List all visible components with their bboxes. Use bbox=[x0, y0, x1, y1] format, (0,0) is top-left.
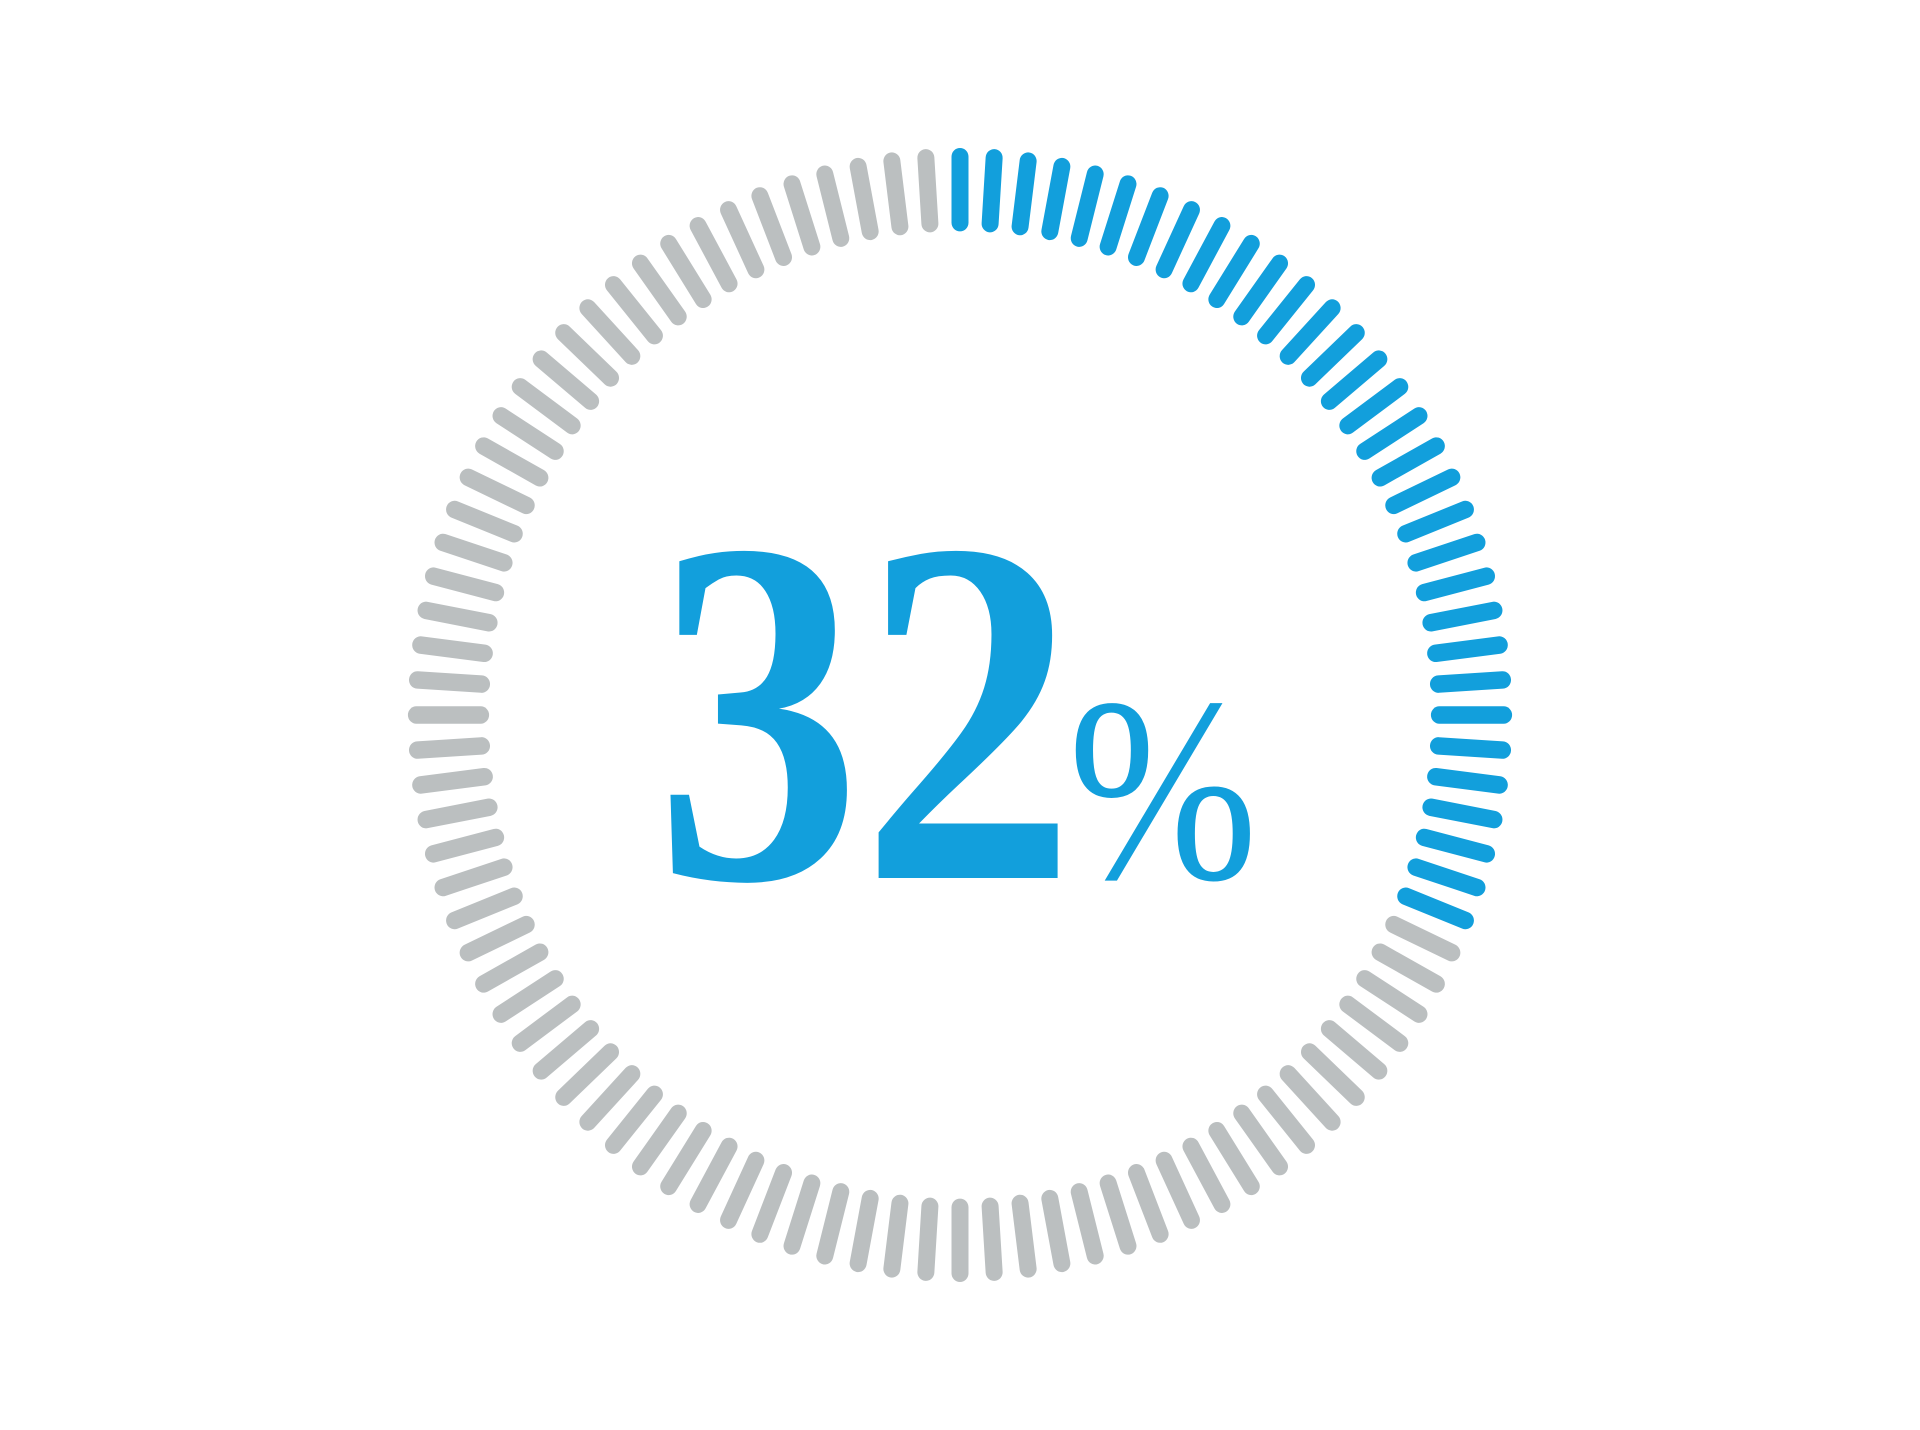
remaining ticks: 68 grey bbox=[353, 88, 1452, 1342]
digit 2: 2 bbox=[860, 439, 1076, 986]
radial gauge: 100 ticks bbox=[353, 88, 1567, 1342]
percentage value: 32% bbox=[655, 439, 1258, 986]
percent sign: % bbox=[1068, 645, 1258, 936]
digit 3: 3 bbox=[655, 439, 861, 986]
filled ticks: 32 blue bbox=[960, 157, 1567, 921]
